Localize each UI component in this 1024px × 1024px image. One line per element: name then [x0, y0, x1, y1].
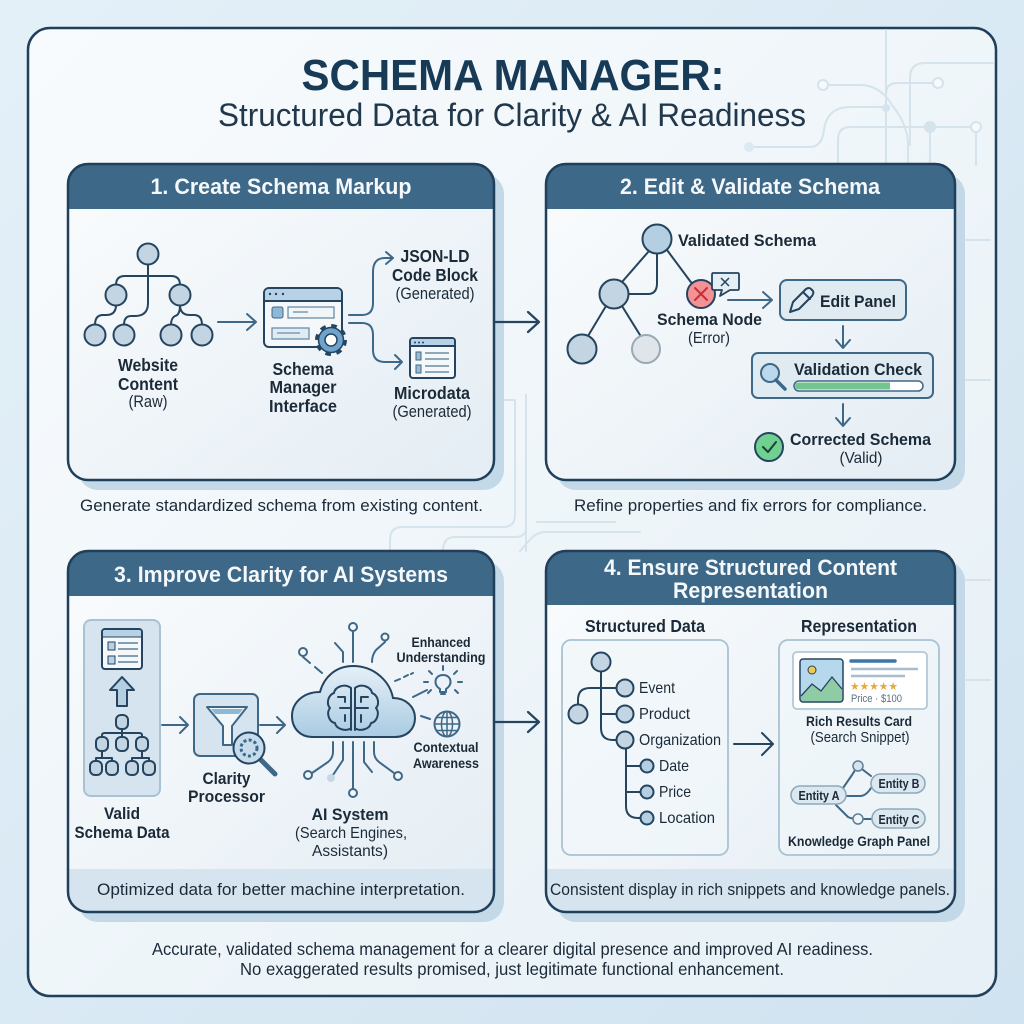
- icon: globe: [434, 711, 460, 737]
- label: corrected schema: [790, 430, 932, 467]
- label: schema manager interface: [269, 359, 337, 416]
- label: AI system: (Search Engines,: [295, 825, 407, 842]
- valid schema data box: [84, 620, 160, 796]
- icon: website content tree: [84, 244, 212, 346]
- structured data tree: Location: [659, 810, 715, 827]
- label: schema manager interface: Interface: [269, 396, 337, 416]
- label: rich results card: [806, 713, 912, 746]
- header 3: [68, 551, 494, 596]
- validation check: [752, 353, 933, 398]
- structured data tree: Date: [659, 758, 689, 775]
- footer 4: [546, 869, 955, 912]
- label: AI system: Assistants): [312, 843, 388, 860]
- knowledge graph: Entity B: [878, 777, 920, 791]
- icon: AI system cloud with brain: [292, 623, 415, 797]
- heading: structured data: Structured Data: [585, 616, 705, 636]
- label: schema node error: (Error): [688, 330, 730, 347]
- header 3: 3. Improve Clarity for AI Systems: [114, 562, 448, 587]
- label: website content: [118, 355, 178, 411]
- label: validated schema: Validated Schema: [678, 231, 817, 250]
- structured data tree: Organization: [639, 732, 721, 749]
- label: clarity processor: Processor: [188, 787, 265, 806]
- label: json-ld code block: JSON-LD: [400, 246, 470, 266]
- label: contextual awareness: Awareness: [413, 755, 479, 771]
- closing note: No exaggerated results promised, just legitimate functional enhancement.: [240, 959, 784, 979]
- label: contextual awareness: Contextual: [414, 739, 478, 755]
- panel 4: structured content representation: [546, 551, 965, 922]
- label: enhanced understanding: Understanding: [396, 649, 486, 665]
- header 4: Representation: [673, 578, 828, 603]
- label: contextual awareness: [413, 739, 479, 771]
- label: website content: (Raw): [128, 393, 168, 411]
- edit panel: [780, 280, 906, 320]
- header 2: [546, 164, 955, 209]
- label: AI system: AI System: [312, 805, 388, 824]
- label: rich results card: (Search Snippet): [810, 729, 910, 746]
- structured data tree: Product: [639, 706, 691, 723]
- structured data tree: Event: [639, 680, 675, 697]
- structured data tree: [562, 640, 728, 855]
- label: valid schema data: [74, 804, 170, 842]
- footer 3: [68, 869, 494, 912]
- arrow: step 3 to step 4: [494, 712, 539, 732]
- subtitle: Structured Data for Clarity & AI Readiness: [218, 97, 806, 133]
- rich results card: [793, 652, 927, 709]
- closing note: [152, 939, 873, 979]
- rich results card: Price · $100: [851, 693, 902, 705]
- arrow: [260, 717, 285, 733]
- panel 2: edit and validate schema: [546, 164, 965, 490]
- representation box: [779, 640, 939, 855]
- label: website content: Website: [118, 355, 178, 375]
- branching arrows: [349, 252, 402, 369]
- label: enhanced understanding: Enhanced: [412, 634, 470, 650]
- label: AI system: [295, 805, 407, 860]
- heading: representation: Representation: [801, 616, 917, 636]
- icon: valid check: [755, 433, 783, 461]
- header 4: [546, 551, 955, 605]
- arrow: [836, 404, 850, 426]
- header 4: 4. Ensure Structured Content: [604, 555, 898, 580]
- edit panel: Edit Panel: [820, 292, 896, 311]
- title: SCHEMA MANAGER:: [302, 51, 724, 100]
- label: clarity processor: [188, 769, 265, 806]
- label: valid schema data: Valid: [104, 804, 140, 823]
- label: json-ld code block: Code Block: [392, 265, 478, 285]
- knowledge graph: Entity A: [798, 789, 840, 803]
- caption 2: Refine properties and fix errors for compliance.: [574, 496, 927, 515]
- header 1: [68, 164, 494, 209]
- icon: schema manager interface: [264, 288, 344, 354]
- arrow: [836, 326, 850, 348]
- label: corrected schema: Corrected Schema: [790, 430, 932, 449]
- header 1: 1. Create Schema Markup: [150, 174, 412, 199]
- label: json-ld code block: (Generated): [396, 285, 474, 303]
- icon: microdata window: [410, 338, 455, 378]
- label: valid schema data: Schema Data: [74, 823, 170, 842]
- label: corrected schema: (Valid): [840, 450, 882, 467]
- label: json-ld code block: [392, 246, 478, 303]
- label: rich results card: Rich Results Card: [806, 713, 912, 729]
- label: clarity processor: Clarity: [202, 769, 251, 788]
- rich results card: ★★★★★: [850, 681, 898, 693]
- arrow: [728, 292, 772, 308]
- closing note: Accurate, validated schema management for a clearer digital presence and improved AI readiness.: [152, 939, 873, 959]
- knowledge graph: Entity C: [878, 813, 920, 827]
- icon: light bulb: [395, 666, 462, 719]
- label: microdata: (Generated): [392, 403, 472, 421]
- panel 1: create schema markup: [68, 164, 504, 490]
- label: knowledge graph panel: Knowledge Graph Panel: [788, 833, 930, 849]
- label: schema manager interface: Manager: [270, 377, 337, 397]
- footer 3: Optimized data for better machine interpretation.: [97, 880, 465, 899]
- icon: clarity processor: [194, 694, 275, 774]
- arrow: [734, 733, 773, 755]
- footer 4: Consistent display in rich snippets and knowledge panels.: [550, 880, 950, 899]
- label: website content: Content: [118, 374, 178, 394]
- arrow: [162, 717, 188, 733]
- label: schema manager interface: Schema: [272, 359, 334, 379]
- label: schema node error: Schema Node: [657, 310, 762, 329]
- label: microdata: [392, 383, 472, 421]
- arrow: [218, 314, 256, 330]
- icon: schema tree with error node: [568, 224, 739, 364]
- header 2: 2. Edit & Validate Schema: [620, 174, 881, 199]
- validation check: Validation Check: [794, 360, 923, 379]
- label: enhanced understanding: [396, 634, 486, 665]
- panel 3: improve clarity for AI systems: [68, 551, 504, 922]
- label: microdata: Microdata: [394, 383, 470, 403]
- background circuit traces: [390, 30, 993, 680]
- label: schema node error: [657, 310, 762, 347]
- knowledge graph: [791, 761, 925, 828]
- arrow: step 1 to step 2: [494, 312, 539, 332]
- caption 1: Generate standardized schema from existing content.: [80, 496, 483, 515]
- structured data tree: Price: [659, 784, 691, 801]
